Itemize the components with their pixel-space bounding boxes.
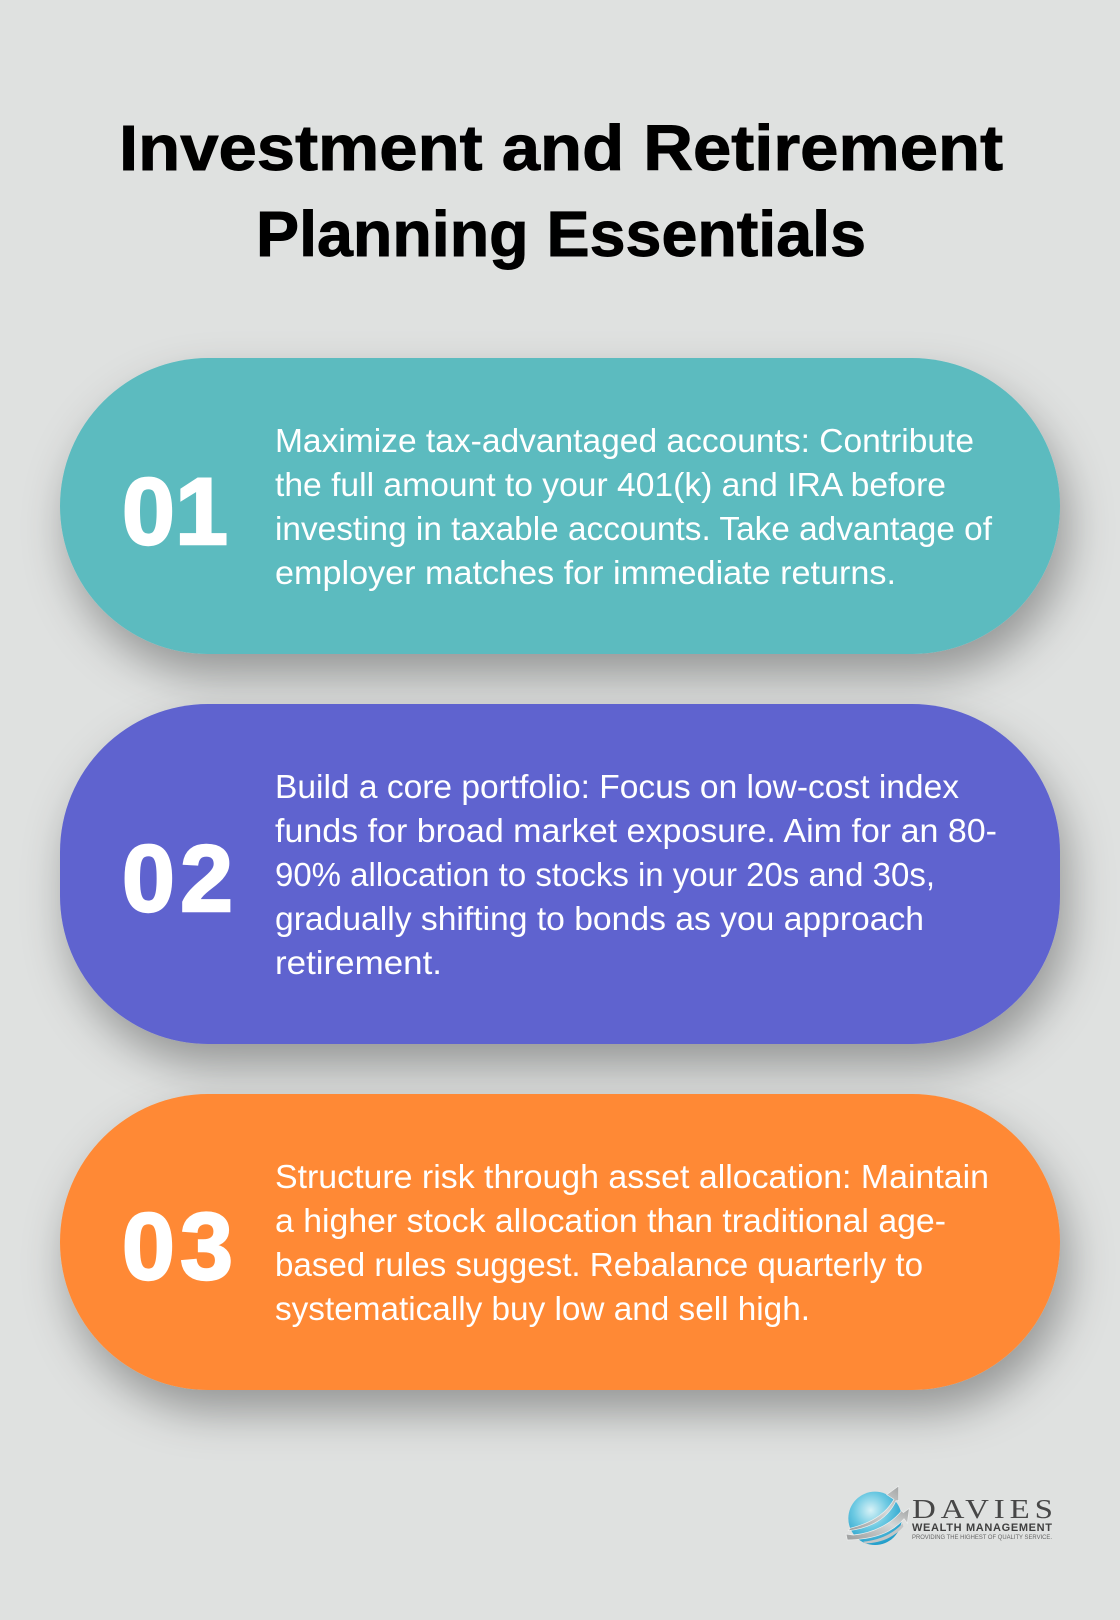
text: step 03 description [275, 1159, 989, 1328]
text: step 02 description: retirement. [275, 945, 442, 982]
number 02: 02 [122, 826, 233, 932]
panel: step 03 [60, 1094, 1060, 1390]
text: step 02 description: funds for broad market exposure. Aim for an 80- [275, 813, 997, 850]
title [119, 112, 1003, 270]
panel: step 01 [60, 358, 1060, 654]
panel: step 02 [60, 704, 1060, 1044]
logo: Davies Wealth Management [846, 1486, 1058, 1545]
title: Investment and Retirement [119, 112, 1003, 184]
logo text: DAVIES: DAVIES [912, 1494, 1058, 1524]
number 03: 03 [122, 1194, 233, 1300]
text: step 03 description: a higher stock allocation than traditional age- [275, 1203, 946, 1240]
number 01: 01 [122, 459, 228, 565]
text: step 01 description [275, 423, 993, 592]
text: step 02 description: Build a core portfolio: Focus on low-cost index [275, 769, 959, 806]
logo text: tagline: PROVIDING THE HIGHEST OF QUALITY SERVICE. [912, 1534, 1052, 1541]
text: step 02 description: 90% allocation to stocks in your 20s and 30s, [275, 857, 935, 894]
text: step 03 description: systematically buy low and sell high. [275, 1291, 810, 1328]
title: Planning Essentials [256, 198, 866, 270]
logo text: WEALTH MANAGEMENT: WEALTH MANAGEMENT [912, 1522, 1052, 1534]
text: step 02 description: gradually shifting to bonds as you approach [275, 901, 924, 938]
text: step 02 description [275, 769, 997, 982]
text: step 03 description: based rules suggest. Rebalance quarterly to [275, 1247, 923, 1284]
text: step 01 description: Maximize tax-advantaged accounts: Contribute [275, 423, 974, 460]
text: step 03 description: Structure risk through asset allocation: Maintain [275, 1159, 989, 1196]
text: step 01 description: employer matches for immediate returns. [275, 555, 896, 592]
text: step 01 description: the full amount to your 401(k) and IRA before [275, 467, 946, 504]
text: step 01 description: investing in taxable accounts. Take advantage of [275, 511, 993, 548]
icon: globe with arrows [846, 1486, 909, 1545]
